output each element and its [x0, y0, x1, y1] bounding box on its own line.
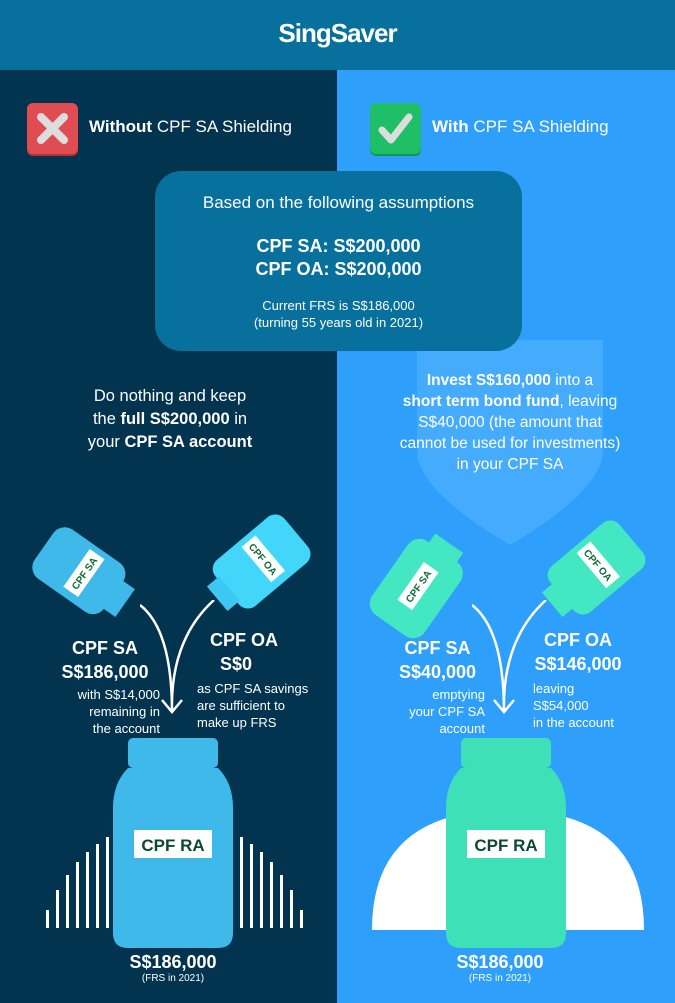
jar: right CPF OA [542, 520, 646, 617]
left description [88, 387, 252, 451]
left OA text: are sufficient to [197, 698, 285, 713]
left panel background [0, 70, 337, 1003]
left OA text: as CPF SA savings [197, 681, 308, 696]
left description: your CPF SA account [88, 433, 252, 451]
arrows right [472, 600, 547, 714]
right OA text: S$54,000 [533, 698, 589, 713]
assumptions box [155, 171, 522, 351]
right description: in your CPF SA [457, 456, 563, 473]
left total: S$186,000 [129, 952, 217, 972]
heading: with: With CPF SA Shielding [432, 117, 609, 136]
right panel background [337, 70, 675, 1003]
heading: without: Without CPF SA Shielding [89, 117, 292, 136]
left OA text: S$0 [220, 654, 252, 674]
right description: Invest S$160,000 into a [427, 372, 593, 389]
left SA text: remaining in [89, 704, 160, 719]
left OA text: make up FRS [197, 715, 276, 730]
jar: right CPF OA: CPF OA [581, 548, 613, 584]
shield shape [417, 340, 603, 545]
jar: left CPF OA [207, 514, 310, 611]
left SA text: CPF SA [72, 638, 138, 658]
jar: right CPF SA: CPF SA [404, 569, 434, 605]
icon: green check [370, 103, 421, 154]
right OA text: S$146,000 [534, 654, 622, 674]
right description [400, 372, 620, 473]
right SA text [399, 638, 485, 736]
left total: (FRS in 2021) [142, 973, 204, 984]
right description: cannot be used for investments) [400, 435, 620, 452]
right SA text: CPF SA [404, 638, 470, 658]
assumptions box: Current FRS is S$186,000 [262, 298, 415, 313]
right description: short term bond fund, leaving [403, 393, 617, 410]
right OA text: leaving [533, 681, 574, 696]
right total [456, 952, 544, 984]
arrows left [140, 600, 215, 714]
left SA text [61, 638, 160, 736]
left description: the full S$200,000 in [93, 410, 247, 428]
assumptions box: CPF SA: S$200,000 [256, 236, 421, 256]
right OA text: in the account [533, 715, 614, 730]
left OA text [197, 630, 308, 730]
left OA text: CPF OA [210, 630, 278, 650]
right white dome [372, 817, 644, 930]
right SA text: emptying [432, 687, 485, 702]
big jar right CPF RA [446, 738, 566, 948]
right description: S$40,000 (the amount that [418, 414, 602, 431]
right SA text: account [439, 721, 485, 736]
left stripes dome [46, 837, 303, 928]
left SA text: with S$14,000 [78, 687, 160, 702]
right OA text: CPF OA [544, 630, 612, 650]
right SA text: S$40,000 [399, 662, 476, 682]
logo: SingSaver [278, 18, 397, 48]
assumptions box: (turning 55 years old in 2021) [254, 315, 423, 330]
left SA text: the account [93, 721, 160, 736]
assumptions box: Based on the following assumptions [203, 193, 474, 212]
big jar right CPF RA: CPF RA [474, 836, 538, 855]
jar: left CPF SA: CPF SA [70, 556, 100, 592]
right OA text [533, 630, 622, 730]
jar: left CPF OA: CPF OA [246, 542, 278, 578]
jar: right CPF SA [370, 534, 463, 638]
right total: S$186,000 [456, 952, 544, 972]
big jar left CPF RA: CPF RA [141, 836, 205, 855]
big jar left CPF RA [113, 738, 233, 948]
jar: left CPF SA [32, 527, 135, 617]
left description: Do nothing and keep [94, 387, 246, 405]
header [0, 0, 675, 70]
right SA text: your CPF SA [409, 704, 485, 719]
left SA text: S$186,000 [61, 662, 149, 682]
assumptions box: CPF OA: S$200,000 [255, 259, 422, 279]
right total: (FRS in 2021) [469, 973, 531, 984]
icon: red cross [27, 103, 78, 154]
left total [129, 952, 217, 984]
